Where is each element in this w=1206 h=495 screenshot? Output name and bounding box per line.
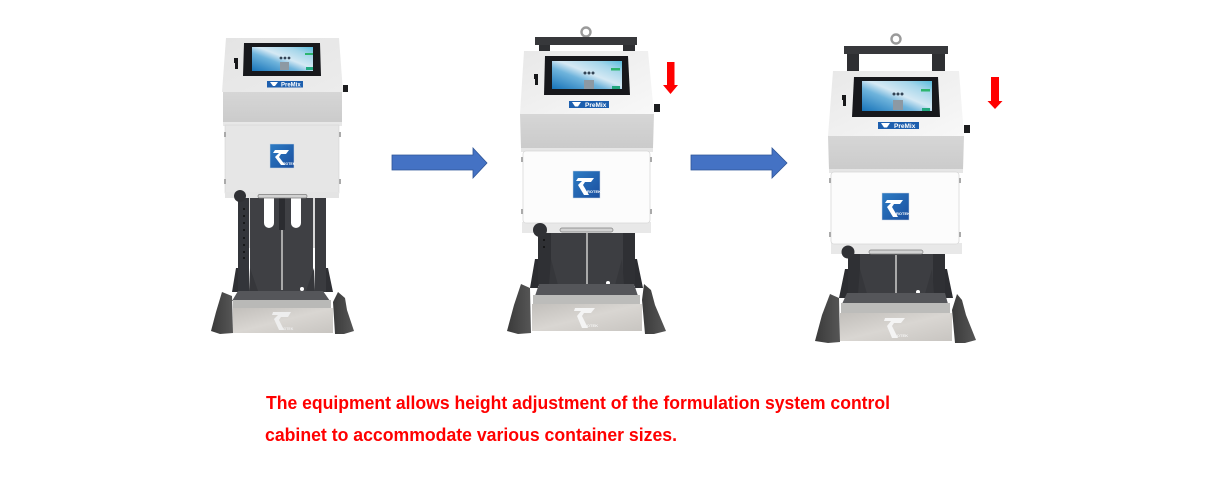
side latch: [654, 104, 660, 112]
control cabinet top: [828, 71, 964, 136]
base tray: [840, 293, 952, 341]
stand columns: [232, 198, 333, 292]
lifting ring: [582, 28, 590, 36]
adjustment knob: [842, 246, 854, 258]
equipment: lowest position with raised handle: [815, 34, 976, 343]
PreMix badge: [878, 122, 919, 130]
touch screen: [852, 77, 940, 117]
logo tile: [270, 144, 296, 168]
PreMix badge: [267, 81, 303, 88]
logo tile: [573, 171, 601, 198]
left foot: [211, 292, 233, 334]
control cabinet top: [222, 38, 343, 92]
PreMix badge: PreMix: [281, 82, 301, 88]
door handle: [560, 228, 613, 232]
stand: [839, 254, 953, 298]
base tray: ROTEK: [584, 323, 598, 328]
side latch: [964, 125, 970, 133]
door handle: [869, 250, 923, 254]
caption: [265, 392, 890, 445]
door handle: [258, 194, 307, 198]
logo tile: ROTEK: [587, 189, 601, 194]
lifting ring: [892, 34, 900, 44]
arrow: step two to step three: [691, 148, 787, 178]
red arrow: lowering cabinet, right unit: [988, 77, 1002, 109]
right foot: [952, 294, 976, 343]
PreMix badge: [569, 101, 609, 109]
touch screen: [544, 56, 630, 95]
toggle knob: [842, 95, 846, 106]
touch screen: [243, 43, 321, 76]
caption: cabinet to accommodate various container sizes.: [265, 424, 677, 445]
logo tile: ROTEK: [896, 211, 910, 216]
control cabinet lower hood: [223, 92, 342, 123]
left foot: [507, 284, 531, 334]
PreMix badge: PreMix: [894, 123, 916, 130]
door panel: [521, 148, 653, 233]
stand: [530, 232, 643, 288]
control cabinet lower hood: [828, 136, 964, 170]
control cabinet top: [520, 51, 654, 114]
adjustment knob: [234, 190, 246, 202]
toggle knob: [534, 74, 538, 85]
caption: The equipment allows height adjustment of the formulation system control: [266, 392, 890, 413]
side latch: [343, 85, 348, 92]
logo tile: [882, 193, 910, 220]
adjustment knob: [533, 223, 547, 237]
base tray: [532, 284, 642, 331]
door panel: [223, 122, 342, 198]
left foot: [815, 294, 840, 343]
toggle knob: [234, 58, 238, 69]
lifting handle: [535, 37, 637, 51]
base tray: ROTEK: [281, 327, 294, 331]
arrow: step one to step two: [392, 148, 487, 178]
equipment: tallest position, no lifting handle: [211, 38, 354, 334]
PreMix badge: PreMix: [585, 102, 607, 109]
equipment: middle position with handle: [507, 28, 666, 334]
control cabinet lower hood: [520, 114, 654, 148]
right foot: [333, 292, 354, 334]
base tray: ROTEK: [894, 333, 908, 338]
door panel: [829, 169, 963, 254]
right foot: [642, 284, 666, 334]
red arrow: lowering cabinet, middle unit: [663, 62, 678, 94]
lifting handle: [844, 46, 948, 72]
base tray: [232, 291, 333, 333]
logo tile: ROTEK: [283, 162, 296, 166]
